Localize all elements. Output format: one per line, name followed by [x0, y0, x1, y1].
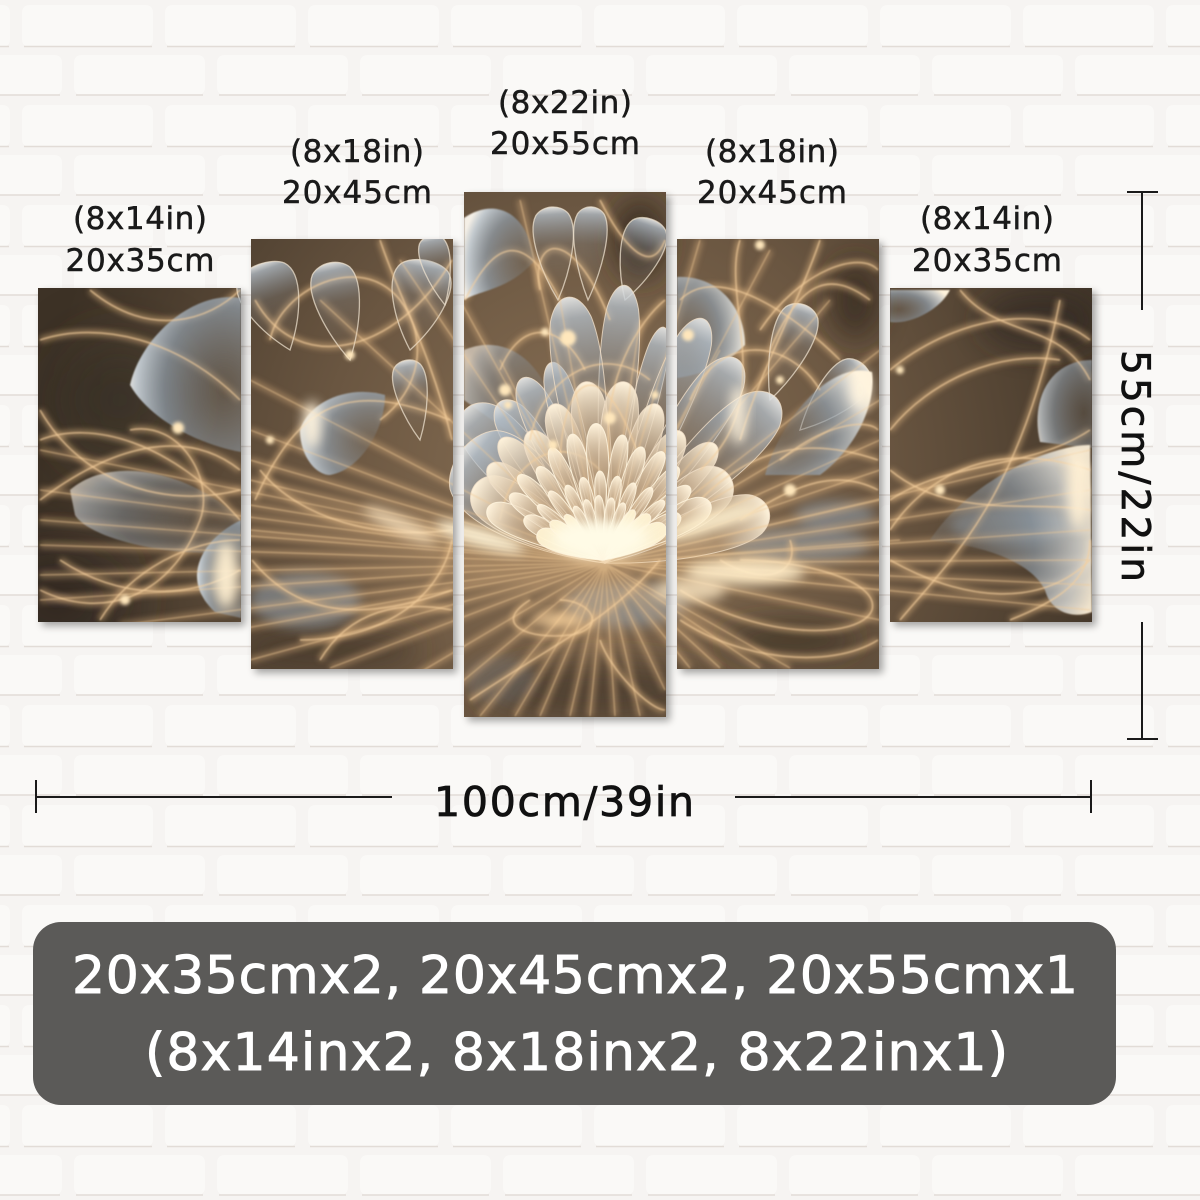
size summary banner: [33, 922, 1116, 1105]
width dimension arrow: [36, 780, 1091, 813]
label: panel 1 size: [66, 201, 214, 279]
label: panel 4 size: (8x18in): [705, 134, 839, 170]
label: panel 2 size: (8x18in): [290, 134, 424, 170]
banner line: inches: (8x14inx2, 8x18inx2, 8x22inx1): [145, 1023, 1008, 1083]
label: panel 4 size: 20x45cm: [697, 175, 847, 211]
height dimension arrow: [1127, 192, 1158, 739]
width dimension label: 100cm/39in: [434, 778, 694, 826]
label: panel 4 size: [697, 134, 847, 211]
banner line: centimetres: 20x35cmx2, 20x45cmx2, 20x55cmx1: [72, 946, 1078, 1006]
height dimension label: 55cm/22in: [1112, 350, 1157, 582]
label: panel 5 size: 20x35cm: [912, 243, 1062, 279]
label: panel 2 size: 20x45cm: [282, 175, 432, 211]
label: panel 2 size: [282, 134, 432, 211]
panel 3: centre canvas: [450, 192, 666, 717]
label: panel 3 size: 20x55cm: [490, 126, 640, 162]
label: panel 5 size: (8x14in): [920, 201, 1054, 237]
label: panel 5 size: [912, 201, 1062, 279]
panel shadows: [42, 196, 1096, 721]
label: panel 1 size: 20x35cm: [66, 243, 214, 279]
label: panel 3 size: [490, 85, 640, 162]
label: panel 3 size: (8x22in): [498, 85, 632, 121]
panel 5: far right canvas: [890, 288, 1092, 622]
panel 4: right canvas: [677, 239, 879, 669]
label: panel 1 size: (8x14in): [73, 201, 207, 237]
panel 2: left canvas: [251, 239, 453, 669]
panel 1: far left canvas: [38, 288, 241, 622]
